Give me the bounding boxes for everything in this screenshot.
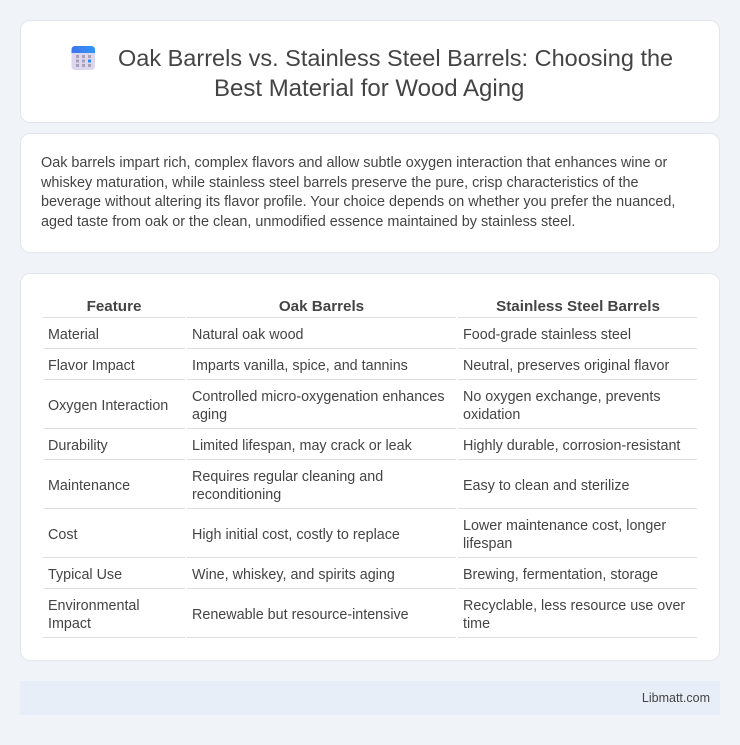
row: Environmental Impact: Recyclable, less resource use over [463,598,685,614]
row: Durability [48,438,680,454]
column header: Oak Barrels: Oak Barrels [279,298,364,315]
row: Environmental Impact [48,598,685,632]
intro paragraph [41,155,675,230]
row: Material: Natural oak wood [192,327,304,343]
row: Typical Use: Brewing, fermentation, storage [463,567,658,583]
row: Flavor Impact: Neutral, preserves original flavor [463,358,669,374]
row: Environmental Impact: Environmental [48,598,140,614]
column header: Feature: Feature [87,298,141,315]
row: Typical Use [48,567,658,583]
row: Oxygen Interaction: aging [192,407,227,423]
row: Oxygen Interaction [48,389,661,423]
title [118,45,673,102]
row: Environmental Impact: Impact [48,616,91,632]
icon: calendar [72,46,95,70]
row: Oxygen Interaction: No oxygen exchange, prevents [463,389,661,405]
column header: Stainless Steel Barrels: Stainless Steel Barrels [496,298,660,315]
row: Maintenance [48,469,629,503]
row: Oxygen Interaction: Oxygen Interaction [48,398,168,414]
row: Environmental Impact: Renewable but resource-intensive [192,607,409,623]
row: Oxygen Interaction: Controlled micro-oxygenation enhances [192,389,444,405]
table [43,298,697,638]
title: Best Material for Wood Aging [214,75,524,102]
row: Durability: Highly durable, corrosion-resistant [463,438,680,454]
row: Flavor Impact: Flavor Impact [48,358,135,374]
row: Flavor Impact [48,358,670,374]
row: Material: Material [48,327,99,343]
row: Cost: Lower maintenance cost, longer [463,518,666,534]
footer credit: Libmatt.com [642,691,710,705]
intro paragraph: Oak barrels impart rich, complex flavors and allow subtle oxygen interaction that enhances wine or [41,155,667,171]
row: Cost: High initial cost, costly to replace [192,527,400,543]
row: Maintenance: Requires regular cleaning and [192,469,383,485]
intro paragraph: aged taste from oak or the clean, unmodified essence maintained by stainless steel. [41,214,575,230]
row: Maintenance: reconditioning [192,487,281,503]
row: Oxygen Interaction: oxidation [463,407,520,423]
row: Material: Food-grade stainless steel [463,327,631,343]
row: Maintenance: Maintenance [48,478,130,494]
intro paragraph: whiskey maturation, while stainless steel barrels preserve the pure, crisp characteristics of the [41,174,638,190]
intro text panel [20,133,720,253]
footer bar [20,681,720,715]
row: Flavor Impact: Imparts vanilla, spice, and tannins [192,358,408,374]
row: Material [48,327,631,343]
row: Environmental Impact: time [463,616,490,632]
row: Typical Use: Wine, whiskey, and spirits aging [192,567,395,583]
header panel [20,20,720,123]
row: Cost: Cost [48,527,77,543]
row: Maintenance: Easy to clean and sterilize [463,478,629,494]
title: Oak Barrels vs. Stainless Steel Barrels: Choosing the [118,45,673,71]
row: Durability: Durability [48,438,108,454]
row: Typical Use: Typical Use [48,567,122,583]
row: Cost [48,518,666,552]
intro paragraph: beverage without altering its flavor profile. Your choice depends on whether you prefer the nuanced, [41,194,675,210]
comparison table panel [20,273,720,661]
row: Durability: Limited lifespan, may crack or leak [192,438,412,454]
row: Cost: lifespan [463,536,512,552]
